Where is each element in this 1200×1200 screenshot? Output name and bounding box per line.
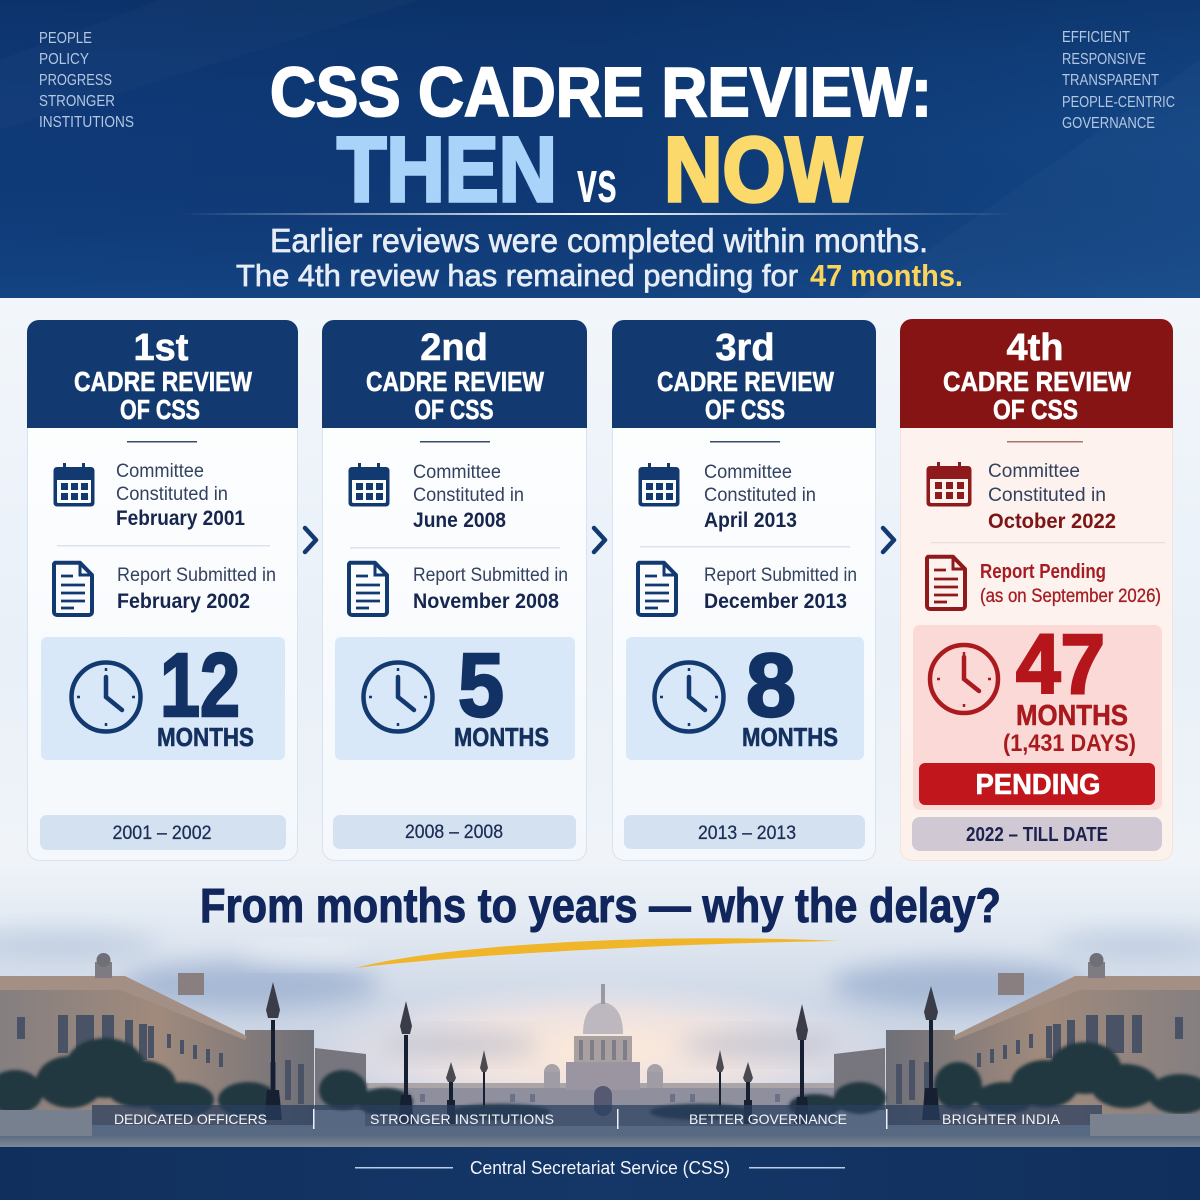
right corner tagline: TRANSPARENT [1062, 72, 1159, 89]
heading: from months to years: From months to years — why the delay? [200, 880, 1001, 933]
committee date: Committee [988, 461, 1080, 482]
clouds and sunset glow [0, 929, 1200, 1120]
report pending [980, 561, 1161, 607]
committee date [988, 461, 1116, 533]
duration box: MONTHS [1016, 700, 1128, 732]
trees [0, 1038, 1200, 1120]
committee date [413, 462, 524, 532]
left corner tagline: PROGRESS [39, 72, 112, 89]
bottom value labels: BRIGHTER INDIA [942, 1111, 1061, 1127]
bottom value labels: STRONGER INSTITUTIONS [370, 1111, 554, 1127]
right corner tagline: GOVERNANCE [1062, 115, 1155, 132]
left corner tagline [39, 30, 134, 131]
panel: 3rd cadre review [612, 320, 876, 860]
right corner tagline [1062, 29, 1175, 132]
dark caption band behind labels [92, 1105, 1102, 1135]
committee date: Committee [116, 461, 204, 482]
right secretariat block [834, 953, 1200, 1125]
panel: 2nd cadre review: OF CSS [414, 394, 494, 425]
committee date [704, 462, 816, 532]
committee date: Committee [413, 462, 501, 483]
icon: clock [364, 662, 432, 732]
report date [117, 565, 276, 613]
committee date: June 2008 [413, 509, 506, 532]
left secretariat block [0, 953, 366, 1125]
report date [413, 565, 568, 613]
arrow [883, 528, 894, 552]
committee date [116, 461, 245, 530]
left corner tagline: POLICY [39, 51, 89, 68]
panel: 4th cadre review: 4th [1006, 327, 1064, 369]
pending status bar [919, 763, 1155, 805]
panel: 4th cadre review [900, 319, 1173, 860]
duration box: 47 [1016, 617, 1105, 711]
report pending: Report Pending [980, 561, 1106, 583]
left corner tagline: STRONGER [39, 93, 115, 110]
right corner tagline: EFFICIENT [1062, 29, 1130, 46]
report date: Report Submitted in [704, 565, 857, 586]
title: NOW [664, 119, 862, 221]
duration box: 8 [746, 636, 796, 736]
bottom value labels [114, 1109, 1061, 1129]
duration box [41, 636, 285, 760]
card header [900, 319, 1173, 428]
icon: calendar [348, 463, 390, 506]
icon: document [54, 563, 92, 615]
duration box [335, 636, 575, 760]
report date [704, 565, 857, 613]
duration box: MONTHS [157, 722, 254, 752]
duration box: (1,431 DAYS) [1003, 730, 1136, 757]
panel: 1st cadre review: OF CSS [120, 394, 200, 425]
committee date: Constituted in [413, 485, 524, 506]
panel: 2nd cadre review: CADRE REVIEW [366, 366, 544, 397]
left corner tagline: PEOPLE [39, 30, 92, 47]
committee date: Constituted in [988, 485, 1106, 506]
panel: 2nd cadre review [322, 320, 587, 860]
right corner tagline: RESPONSIVE [1062, 51, 1146, 68]
committee date: Committee [704, 462, 792, 483]
title: THEN [337, 119, 557, 221]
report date: December 2013 [704, 590, 847, 613]
left corner tagline: INSTITUTIONS [39, 114, 134, 131]
panel: 4th cadre review: CADRE REVIEW [943, 366, 1131, 397]
icon: calendar [54, 463, 94, 506]
panel: 1st cadre review: CADRE REVIEW [74, 366, 252, 397]
panel: 3rd cadre review: CADRE REVIEW [657, 366, 834, 397]
subtitle: The 4th review has remained pending for [236, 258, 798, 293]
yellow brush stroke [355, 938, 840, 968]
icon: clock [72, 662, 140, 732]
panel: 3rd cadre review: OF CSS [705, 394, 785, 425]
icon: calendar [926, 462, 972, 506]
duration box [626, 636, 864, 760]
right corner tagline: PEOPLE-CENTRIC [1062, 94, 1175, 111]
year range: 2008 – 2008 [405, 822, 503, 843]
icon: calendar [638, 463, 680, 506]
year range: 2001 – 2002 [112, 823, 212, 844]
arrow [594, 528, 605, 552]
year range [333, 815, 576, 849]
footer label: Central Secretariat Service (CSS) [470, 1157, 730, 1178]
year range [40, 815, 286, 850]
year range [624, 815, 865, 849]
year range: 2022 – TILL DATE [966, 824, 1108, 846]
central secretariat and dome [365, 984, 835, 1126]
card header [322, 320, 587, 428]
icon: document [349, 563, 387, 615]
footer band [0, 1147, 1200, 1200]
header band [0, 0, 1200, 298]
lamp posts [264, 982, 940, 1124]
panel: 4th cadre review: OF CSS [993, 394, 1078, 425]
arrow [305, 528, 316, 552]
card header [612, 320, 876, 428]
duration box: MONTHS [454, 722, 549, 752]
duration box: MONTHS [742, 722, 838, 752]
subtitle: Earlier reviews were completed within months. [270, 222, 928, 259]
icon: document [638, 563, 676, 615]
panel: 2nd cadre review: 2nd [420, 327, 488, 369]
card header [27, 320, 298, 428]
year range: 2013 – 2013 [698, 823, 796, 844]
subtitle [236, 222, 963, 293]
icon: clock [654, 662, 724, 732]
report date: November 2008 [413, 590, 559, 613]
pending status bar: PENDING [976, 769, 1100, 801]
duration box [913, 617, 1162, 810]
report date: Report Submitted in [117, 565, 276, 586]
committee date: Constituted in [116, 484, 228, 505]
page background [0, 298, 1200, 1148]
panel: 1st cadre review [27, 320, 298, 860]
subtitle: 47 months. [810, 258, 963, 293]
title: vs [577, 150, 617, 215]
icon: clock [930, 645, 998, 713]
report pending: (as on September 2026) [980, 586, 1161, 607]
skyline photo: sky, buildings and trees [0, 929, 1200, 1147]
title: CSS CADRE REVIEW: [270, 53, 932, 131]
report date: February 2002 [117, 590, 250, 613]
committee date: October 2022 [988, 510, 1116, 533]
committee date: April 2013 [704, 509, 797, 532]
icon: document [927, 557, 965, 609]
title [270, 53, 932, 221]
stone terrace [0, 1110, 1200, 1147]
committee date: February 2001 [116, 507, 245, 530]
bottom value labels: DEDICATED OFFICERS [114, 1111, 267, 1127]
duration box: 12 [160, 636, 240, 736]
bottom value labels: BETTER GOVERNANCE [689, 1111, 847, 1127]
duration box: 5 [458, 636, 504, 736]
report date: Report Submitted in [413, 565, 568, 586]
committee date: Constituted in [704, 485, 816, 506]
panel: 3rd cadre review: 3rd [715, 327, 775, 369]
panel: 1st cadre review: 1st [134, 327, 189, 369]
year range [912, 817, 1162, 851]
